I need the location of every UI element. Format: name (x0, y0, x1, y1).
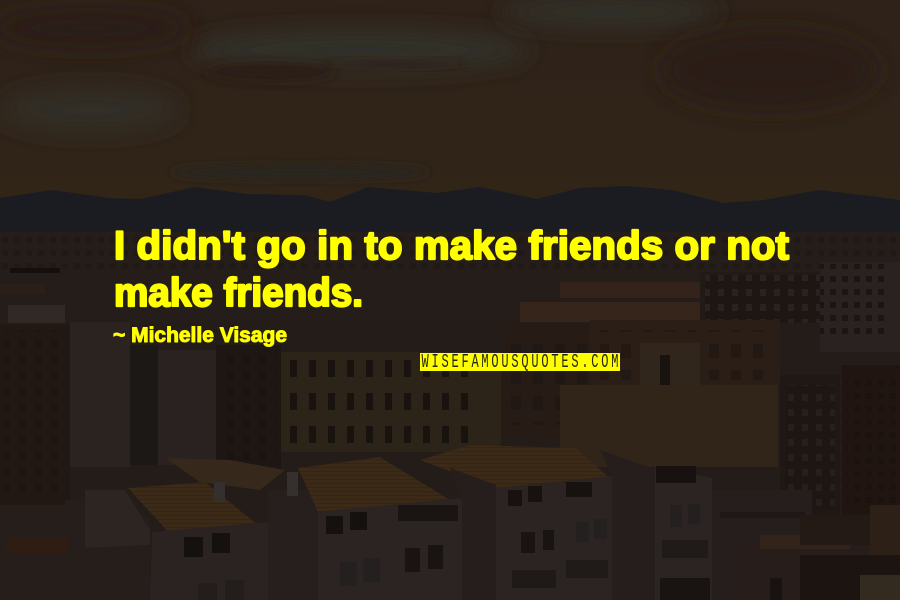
foreground buildings left (0, 458, 318, 600)
quote line 2: make friends. (114, 271, 363, 315)
foreground buildings centre (298, 445, 612, 600)
mountains (0, 186, 900, 238)
city skyline band (0, 232, 900, 352)
attribution: ~ Michelle Visage (113, 324, 287, 347)
mid-rise buildings (0, 320, 900, 515)
foreground buildings right (600, 450, 900, 600)
quote text (113, 224, 789, 347)
sky with clouds (0, 0, 900, 205)
quote line 1: I didn't go in to make friends or not (114, 224, 789, 268)
watermark badge: WISEFAMOUSQUOTES.COM (422, 352, 618, 373)
